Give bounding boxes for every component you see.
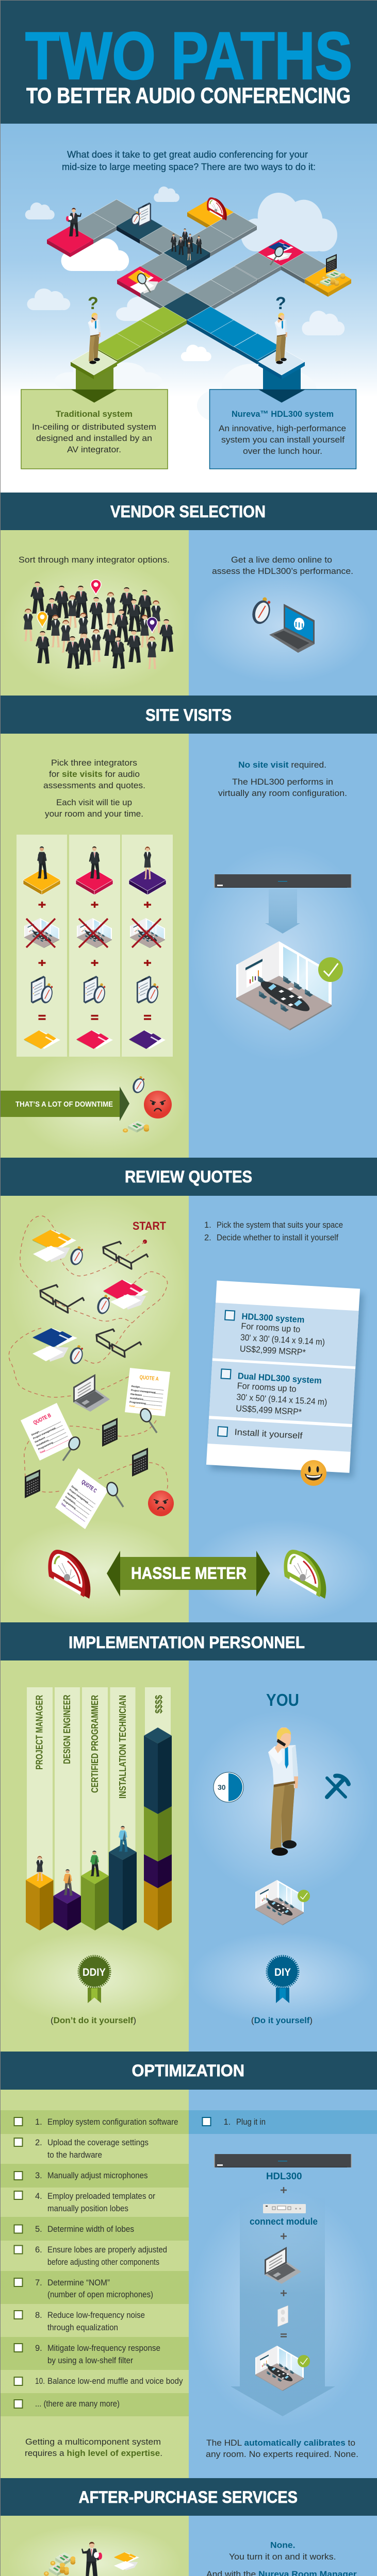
plus xyxy=(281,2187,287,2193)
big arrow xyxy=(231,2195,335,2416)
arrow down xyxy=(71,389,118,403)
callout: lots of downtime: THAT’S A LOT OF DOWNTIME xyxy=(15,1100,113,1109)
option: HDL300 system: 30' x 30' (9.14 x 9.14 m) xyxy=(240,1332,325,1347)
quote A: Total xyxy=(129,1404,135,1408)
laptop xyxy=(265,2247,301,2284)
checklist text: (number of open microphones) xyxy=(47,2290,153,2299)
icons: folders and glasses xyxy=(32,1230,149,1412)
bar: certified programmer: CERTIFIED PROGRAMMER xyxy=(90,1695,100,1793)
quote B: Installation xyxy=(36,1439,50,1448)
column backgrounds xyxy=(0,530,377,2576)
intro text: What does it take to get great audio conferencing for your xyxy=(67,149,308,160)
isometric board paths xyxy=(47,199,351,364)
heading: optimization: OPTIMIZATION xyxy=(132,2061,244,2080)
bar: total cost stack: $$$$ xyxy=(154,1695,164,1714)
checklist text: Employ preloaded templates or xyxy=(47,2192,155,2201)
badge: DDIY xyxy=(78,1956,110,2003)
heading: site visits xyxy=(0,696,377,734)
icon: 30 minute timer: 30 xyxy=(218,1783,226,1791)
option: Dual HDL300 system: For rooms up to xyxy=(237,1381,297,1394)
quote A: QUOTE A xyxy=(139,1374,159,1382)
text: don't do it yourself: (Don’t do it yourself) xyxy=(51,2015,136,2025)
box body: An innovative, high-performance xyxy=(219,423,346,433)
quote C: Total xyxy=(61,1502,67,1507)
illustration: live demo laptop and stopwatch xyxy=(250,597,315,653)
checklist text: by using a low-shelf filter xyxy=(47,2356,133,2365)
checklist text: Upload the coverage settings xyxy=(47,2138,149,2147)
checklist text: 3. xyxy=(35,2171,42,2180)
option: install it yourself: Install it yourself xyxy=(234,1427,303,1441)
badge: DIY: DIY xyxy=(274,1967,291,1978)
quote A: Design xyxy=(131,1385,140,1389)
start label: START xyxy=(133,1219,167,1232)
checklist text: 9. xyxy=(35,2344,42,2353)
quote C: Programming xyxy=(63,1499,76,1510)
quote A: Installation xyxy=(130,1397,143,1401)
icon: red gauge xyxy=(48,1550,90,1599)
bar: installation technician: INSTALLATION TECHNICIAN xyxy=(118,1695,128,1799)
option: Dual HDL300 system: US$5,499 MSRP* xyxy=(236,1403,302,1417)
panel: plug it in xyxy=(189,2110,377,2416)
plus xyxy=(281,2290,287,2296)
text: site visits left: Pick three integrators xyxy=(51,758,137,768)
text: expertise note: Getting a multicomponent system xyxy=(25,2437,161,2447)
text: pick system steps xyxy=(204,1221,343,1243)
quote C: QUOTE C xyxy=(80,1479,97,1495)
arrow down xyxy=(258,389,305,403)
checklist text: 10. xyxy=(35,2377,45,2386)
double arrow with label: HASSLE METER xyxy=(131,1564,247,1583)
bar: certified programmer xyxy=(81,1687,109,1930)
illustration: person on phone xyxy=(268,1727,298,1856)
option: Dual HDL300 system: Dual HDL300 system xyxy=(237,1371,322,1386)
connect module xyxy=(263,2204,306,2213)
service: training xyxy=(37,2542,153,2576)
quote C: Hardware xyxy=(67,1492,77,1500)
option: Dual HDL300 system xyxy=(219,1369,329,1418)
heading: vendor selection xyxy=(0,493,377,530)
bar: total cost stack xyxy=(144,1687,172,1930)
text: site visits right: No site visit required. xyxy=(238,760,326,770)
heading: implementation personnel: IMPLEMENTATION PERSONNEL xyxy=(69,1633,305,1652)
text: auto calibration note: The HDL automatically calibrates to xyxy=(206,2438,355,2448)
power outlet xyxy=(277,2306,288,2327)
quote B: Design xyxy=(31,1430,40,1437)
icon: happy face xyxy=(301,1460,326,1486)
quote A: Programming xyxy=(129,1401,146,1405)
box body: In-ceiling or distributed system xyxy=(32,422,156,432)
heading: after-purchase services xyxy=(0,2478,377,2516)
checklist text: 5. xyxy=(35,2225,42,2234)
icon: board icons xyxy=(66,197,345,294)
left start: traditional person xyxy=(71,294,117,389)
text: pick system steps: 1. xyxy=(204,1221,211,1230)
heading: optimization xyxy=(0,2052,377,2090)
box body: system you can install yourself xyxy=(221,435,345,445)
quote B: Programming xyxy=(38,1441,54,1451)
bar: project manager: PROJECT MANAGER xyxy=(34,1695,44,1770)
text: site visits right: The HDL300 performs in xyxy=(232,777,333,787)
text: site visits left: for site visits for audio xyxy=(49,769,140,779)
text: none needed: None. xyxy=(270,2540,295,2550)
checklist text: 7. xyxy=(35,2278,42,2287)
HDL300 bar xyxy=(214,2154,352,2167)
icon: 30 minute timer xyxy=(214,1772,243,1802)
heading: review quotes xyxy=(0,1158,377,1196)
checklist text: 4. xyxy=(35,2192,42,2201)
text: pick system steps: Pick the system that suits your space xyxy=(217,1221,343,1230)
hassle meter xyxy=(48,1550,326,1599)
illustration: crowd of integrators xyxy=(23,580,173,669)
option: install it yourself xyxy=(218,1426,303,1441)
heading: after-purchase services: AFTER-PURCHASE SERVICES xyxy=(78,2488,298,2506)
quote C: Design xyxy=(71,1485,78,1492)
box body: designed and installed by an xyxy=(36,433,152,443)
checklist text: 8. xyxy=(35,2311,42,2320)
option: Dual HDL300 system: 30' x 50' (9.14 x 15.24 m) xyxy=(236,1392,327,1407)
option: HDL300 system: US$2,999 MSRP* xyxy=(239,1344,306,1358)
quote B: Project management xyxy=(32,1427,56,1440)
plus xyxy=(281,2233,287,2239)
checklist text: Reduce low-frequency noise xyxy=(47,2311,145,2320)
box heading: Nureva™ HDL300 system xyxy=(232,409,334,419)
column: purple integrator xyxy=(122,835,173,1057)
checklist text: Manually adjust microphones xyxy=(47,2171,147,2180)
checklist text: through equalization xyxy=(47,2323,118,2332)
panel: tilted order card xyxy=(206,1281,364,1478)
badge: DIY xyxy=(267,1956,298,2003)
text: site visits left: assessments and quotes. xyxy=(43,781,145,790)
dashed path xyxy=(9,1216,168,1492)
box body: over the lunch hour. xyxy=(243,446,322,456)
label: HDL300: HDL300 xyxy=(266,2171,302,2181)
illustration: HDL300 bar into room xyxy=(214,874,352,1030)
checklist text: Mitigate low-frequency response xyxy=(47,2344,160,2353)
quote B: QUOTE B xyxy=(32,1412,52,1426)
checklist text: ... (there are many more) xyxy=(35,2399,120,2409)
icons: magnifiers, calculators, angry face xyxy=(25,1407,174,1516)
box body: AV integrator. xyxy=(67,445,121,454)
checklist text: before adjusting other components xyxy=(47,2258,159,2267)
clouds xyxy=(25,187,345,422)
bar: design engineer xyxy=(54,1687,81,1930)
text: site visits right xyxy=(218,760,347,798)
text: none needed xyxy=(206,2540,359,2576)
column: yellow integrator xyxy=(17,835,67,1057)
panel: plug it in: Plug it in xyxy=(236,2117,266,2127)
icon: hammer and screwdriver xyxy=(327,1776,349,1797)
bar: installation technician xyxy=(109,1687,137,1930)
right start: nureva person: ? xyxy=(275,294,286,313)
box body xyxy=(219,423,346,456)
label: connect module: connect module xyxy=(250,2216,318,2227)
checklist text: Balance low-end muffle and voice body xyxy=(47,2377,183,2386)
text: do it yourself: (Do it yourself) xyxy=(251,2015,313,2025)
illustration: small room ready xyxy=(255,1880,310,1925)
quote A: Project management xyxy=(130,1389,156,1395)
badge: DDIY: DDIY xyxy=(83,1967,106,1978)
checklist text xyxy=(35,2117,183,2409)
heading: site visits: SITE VISITS xyxy=(145,706,232,724)
illustration: winding quote review path xyxy=(9,1216,174,1529)
quote B: Hardware xyxy=(35,1436,46,1444)
quote C xyxy=(55,1468,108,1529)
bar: project manager xyxy=(26,1687,54,1930)
panel: three integrator columns xyxy=(17,835,173,1057)
panel: sky hero with two paths board xyxy=(0,124,377,422)
callout: lots of downtime xyxy=(0,1076,172,1132)
right start: nureva person xyxy=(258,294,305,389)
column: pink integrator xyxy=(69,835,120,1057)
checklist text: 2. xyxy=(35,2138,42,2147)
quote C: Installation xyxy=(65,1495,76,1505)
room ready xyxy=(255,2346,310,2391)
panel: plug it in: 1. xyxy=(224,2117,231,2127)
equals xyxy=(281,2334,287,2337)
checklist text: Employ system configuration software xyxy=(47,2117,178,2127)
text: none needed: You turn it on and it works. xyxy=(229,2552,336,2562)
text: site visits right: virtually any room configuration. xyxy=(218,788,347,798)
heading: you: YOU xyxy=(266,1690,299,1709)
checklist text: Ensure lobes are properly adjusted xyxy=(47,2245,167,2255)
header banner xyxy=(0,0,377,124)
checklist text: 6. xyxy=(35,2245,42,2255)
checklist text: to the hardware xyxy=(47,2150,102,2160)
checklist text: manually position lobes xyxy=(47,2204,128,2213)
text: vendor right xyxy=(212,555,353,576)
checklist text: 1. xyxy=(35,2117,42,2127)
heading: implementation personnel xyxy=(0,1622,377,1660)
text: pick system steps: 2. xyxy=(204,1233,211,1243)
quote B xyxy=(21,1403,76,1461)
box heading: Traditional system xyxy=(56,409,133,419)
text: site visits left: Each visit will tie up xyxy=(56,798,132,807)
quote B: Total xyxy=(39,1449,46,1454)
quote C: Project management xyxy=(69,1488,89,1504)
text: auto calibration note: any room. No experts required. None. xyxy=(206,2449,358,2459)
double arrow with label xyxy=(107,1551,270,1597)
quote A: Hardware xyxy=(130,1393,142,1397)
option: HDL300 system: HDL300 system xyxy=(241,1311,305,1325)
text: pick system steps: Decide whether to install it yourself xyxy=(217,1233,338,1243)
text: auto calibration note xyxy=(206,2438,358,2459)
bar: design engineer: DESIGN ENGINEER xyxy=(62,1694,72,1764)
text: site visits left xyxy=(43,758,145,819)
soft glows behind illustrations xyxy=(2,559,375,2576)
chart: personnel bars xyxy=(26,1687,172,1930)
checklist text: Determine “NOM” xyxy=(47,2278,110,2287)
panel: traditional system box xyxy=(21,389,168,469)
quote A xyxy=(125,1368,170,1416)
text: vendor left: Sort through many integrator options. xyxy=(19,555,170,565)
icon: green gauge xyxy=(284,1550,326,1599)
panel: nureva system box xyxy=(209,389,356,469)
text: expertise note: requires a high level of expertise. xyxy=(25,2448,162,2458)
option: HDL300 system xyxy=(223,1311,326,1359)
heading: vendor selection: VENDOR SELECTION xyxy=(110,502,266,521)
intro text: mid-size to large meeting space? There are two ways to do it: xyxy=(62,162,316,172)
option: HDL300 system: For rooms up to xyxy=(241,1321,301,1334)
left start: traditional person: ? xyxy=(88,294,99,313)
heading: review quotes: REVIEW QUOTES xyxy=(125,1167,252,1186)
box body xyxy=(32,422,156,454)
intro text xyxy=(62,149,316,172)
text: vendor right: assess the HDL300’s performance. xyxy=(212,566,353,576)
panel: optimization checklist xyxy=(0,2110,189,2416)
text: site visits left: your room and your time. xyxy=(45,809,143,819)
text: expertise note xyxy=(25,2437,162,2458)
text: vendor right: Get a live demo online to xyxy=(231,555,332,565)
checklist text: Determine width of lobes xyxy=(47,2225,134,2234)
